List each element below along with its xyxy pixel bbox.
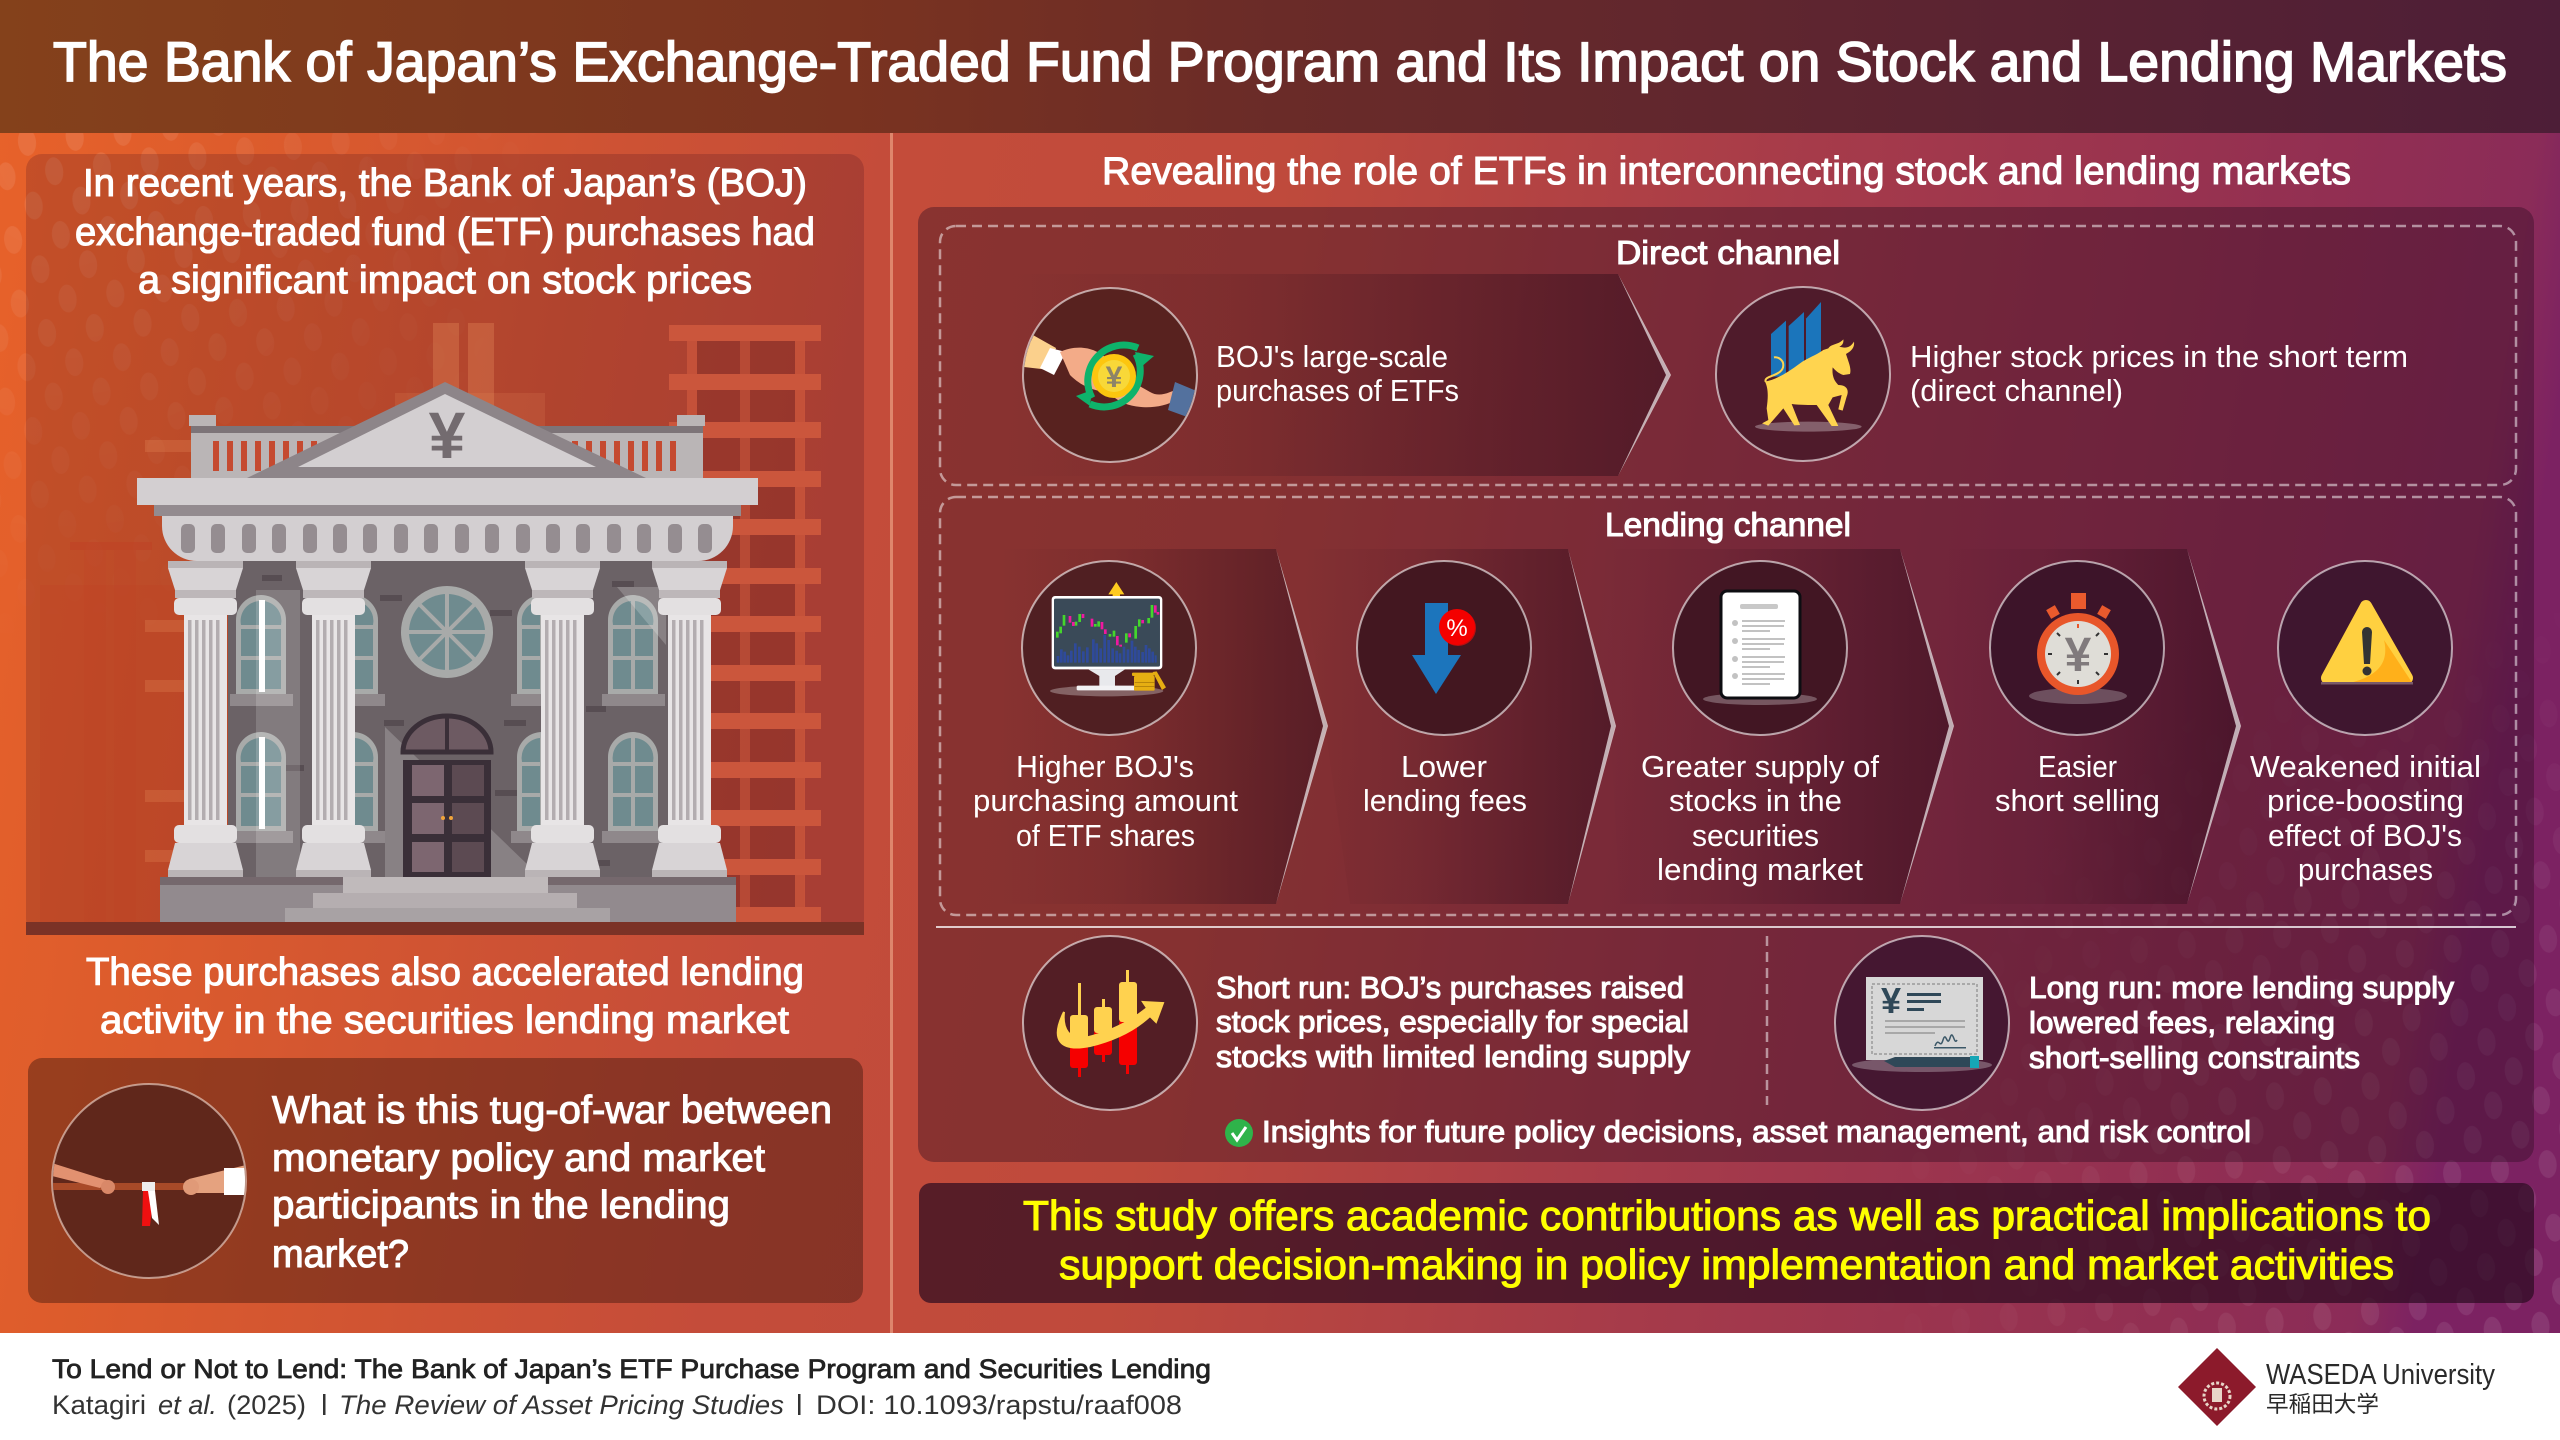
text: weakened effect	[2250, 749, 2481, 887]
icon: coin exchange: ¥	[1106, 361, 1123, 394]
panel: direct channel	[940, 226, 2516, 485]
icon: candlesticks	[1023, 936, 1197, 1110]
panel: right main	[918, 207, 2534, 1162]
text: weakened effect: purchases	[2298, 852, 2433, 887]
left intro text: a significant impact on stock prices	[138, 259, 752, 302]
text: insights: Insights for future policy decisions, asset management, and risk control	[1262, 1114, 2251, 1149]
question text: participants in the lending	[272, 1184, 730, 1227]
icon: certificate and pen	[1835, 936, 2009, 1110]
question text: What is this tug-of-war between	[272, 1089, 832, 1132]
left lending text	[86, 951, 804, 1042]
footer	[0, 1333, 2560, 1440]
text: higher purchasing	[973, 749, 1238, 853]
bank building	[137, 382, 758, 922]
text: greater supply: Greater supply of	[1641, 749, 1879, 784]
text: lower fees: Lower	[1401, 749, 1487, 784]
text: long run: short-selling constraints	[2029, 1040, 2360, 1075]
citation: et al.	[158, 1390, 217, 1420]
text: higher purchasing: of ETF shares	[1016, 818, 1195, 853]
icon: check mark	[1225, 1119, 1253, 1147]
icon: document tablet	[1673, 561, 1847, 735]
icon: fee down arrow	[1357, 561, 1531, 735]
citation: The Review of Asset Pricing Studies	[339, 1390, 784, 1420]
text: higher purchasing: Higher BOJ's	[1016, 749, 1194, 784]
left lending text: activity in the securities lending market	[100, 999, 789, 1042]
text: weakened effect: Weakened initial	[2250, 749, 2481, 784]
text: greater supply: stocks in the	[1669, 783, 1842, 818]
arrow: direct chevron	[1000, 274, 1671, 476]
header band	[0, 0, 2560, 133]
background towers	[40, 323, 821, 922]
right heading: Revealing the role of ETFs in interconnecting stock and lending markets	[1102, 150, 2351, 193]
icon: stopwatch	[1990, 561, 2164, 735]
text: higher purchasing: purchasing amount	[973, 783, 1238, 818]
panel: lending channel	[940, 497, 2516, 915]
text: higher stock prices: (direct channel)	[1910, 373, 2123, 408]
logo: Waseda University: WASEDA University	[2266, 1359, 2495, 1391]
text: long run: Long run: more lending supply	[2029, 970, 2455, 1005]
icon: tug of war	[52, 1084, 248, 1278]
icon: certificate and pen: ¥	[1881, 980, 1901, 1021]
text: long run	[2029, 970, 2455, 1075]
conclusion text: This study offers academic contributions as well as practical implications to	[1023, 1192, 2431, 1239]
ground strip	[26, 922, 864, 935]
text: long run: lowered fees, relaxing	[2029, 1005, 2335, 1040]
text: short run: stock prices, especially for special	[1216, 1004, 1689, 1039]
citation: DOI: 10.1093/rapstu/raaf008	[816, 1390, 1182, 1420]
arrow: chevron 4	[1940, 549, 2241, 904]
arrow: chevron 1	[1000, 549, 1328, 904]
icon: fee down arrow: %	[1446, 615, 1468, 642]
text: greater supply: lending market	[1657, 852, 1863, 887]
citation: Katagiri	[52, 1390, 146, 1420]
vertical dashed divider	[1766, 936, 1768, 1105]
arrow: chevron 3	[1600, 549, 1954, 904]
text: easier short selling: Easier	[2038, 749, 2117, 784]
conclusion text: support decision-making in policy implementation and market activities	[1059, 1241, 2394, 1288]
text: greater supply	[1641, 749, 1879, 887]
section divider	[936, 926, 2516, 928]
icon: stopwatch: ¥	[2065, 629, 2092, 682]
panel: tug-of-war question	[28, 1058, 863, 1303]
text: easier short selling: short selling	[1995, 783, 2160, 818]
text: easier short selling	[1995, 749, 2160, 818]
panel: left upper	[26, 154, 864, 935]
text: BOJ purchases: BOJ's large-scale	[1216, 339, 1448, 374]
left intro text: In recent years, the Bank of Japan’s (BOJ)	[83, 162, 807, 205]
text: lower fees	[1363, 749, 1527, 818]
citation: (2025)	[227, 1390, 306, 1420]
text: BOJ purchases: purchases of ETFs	[1216, 373, 1459, 408]
text: weakened effect: price-boosting	[2267, 783, 2464, 818]
heading: lending channel: Lending channel	[1605, 506, 1851, 543]
title: The Bank of Japan’s Exchange-Traded Fund Program and Its Impact on Stock and Lending Markets	[53, 30, 2507, 93]
left lending text: These purchases also accelerated lending	[86, 951, 804, 994]
text: short run	[1216, 970, 1691, 1074]
logo: Waseda University	[2178, 1348, 2495, 1426]
text: greater supply: securities	[1692, 818, 1819, 853]
text: higher stock prices	[1910, 339, 2408, 408]
icon: monitor chart	[1022, 561, 1196, 735]
arrow: chevron 2	[1300, 549, 1616, 904]
panel: conclusion	[919, 1183, 2534, 1303]
text: short run: stocks with limited lending supply	[1216, 1039, 1691, 1074]
text: short run: Short run: BOJ’s purchases raised	[1216, 970, 1684, 1005]
icon: bull and bars	[1716, 287, 1890, 461]
text: weakened effect: effect of BOJ's	[2268, 818, 2462, 853]
left intro text: exchange-traded fund (ETF) purchases had	[75, 211, 815, 254]
bank building: ¥	[429, 398, 466, 472]
text: higher stock prices: Higher stock prices in the short term	[1910, 339, 2408, 374]
logo: Waseda University: 早稲田大学	[2266, 1392, 2379, 1417]
citation	[52, 1390, 1182, 1420]
question text: monetary policy and market	[272, 1137, 765, 1180]
icon: coin exchange	[1023, 288, 1199, 462]
left intro text	[75, 162, 815, 302]
text: BOJ purchases	[1216, 339, 1459, 408]
question text: market?	[272, 1233, 409, 1276]
paper title: To Lend or Not to Lend: The Bank of Japan’s ETF Purchase Program and Securities Lending	[52, 1354, 1211, 1384]
conclusion text	[1023, 1192, 2431, 1288]
icon: warning triangle	[2278, 561, 2452, 735]
heading: direct channel: Direct channel	[1616, 234, 1840, 271]
question text	[272, 1089, 832, 1276]
column divider	[890, 133, 893, 1333]
text: lower fees: lending fees	[1363, 783, 1527, 818]
